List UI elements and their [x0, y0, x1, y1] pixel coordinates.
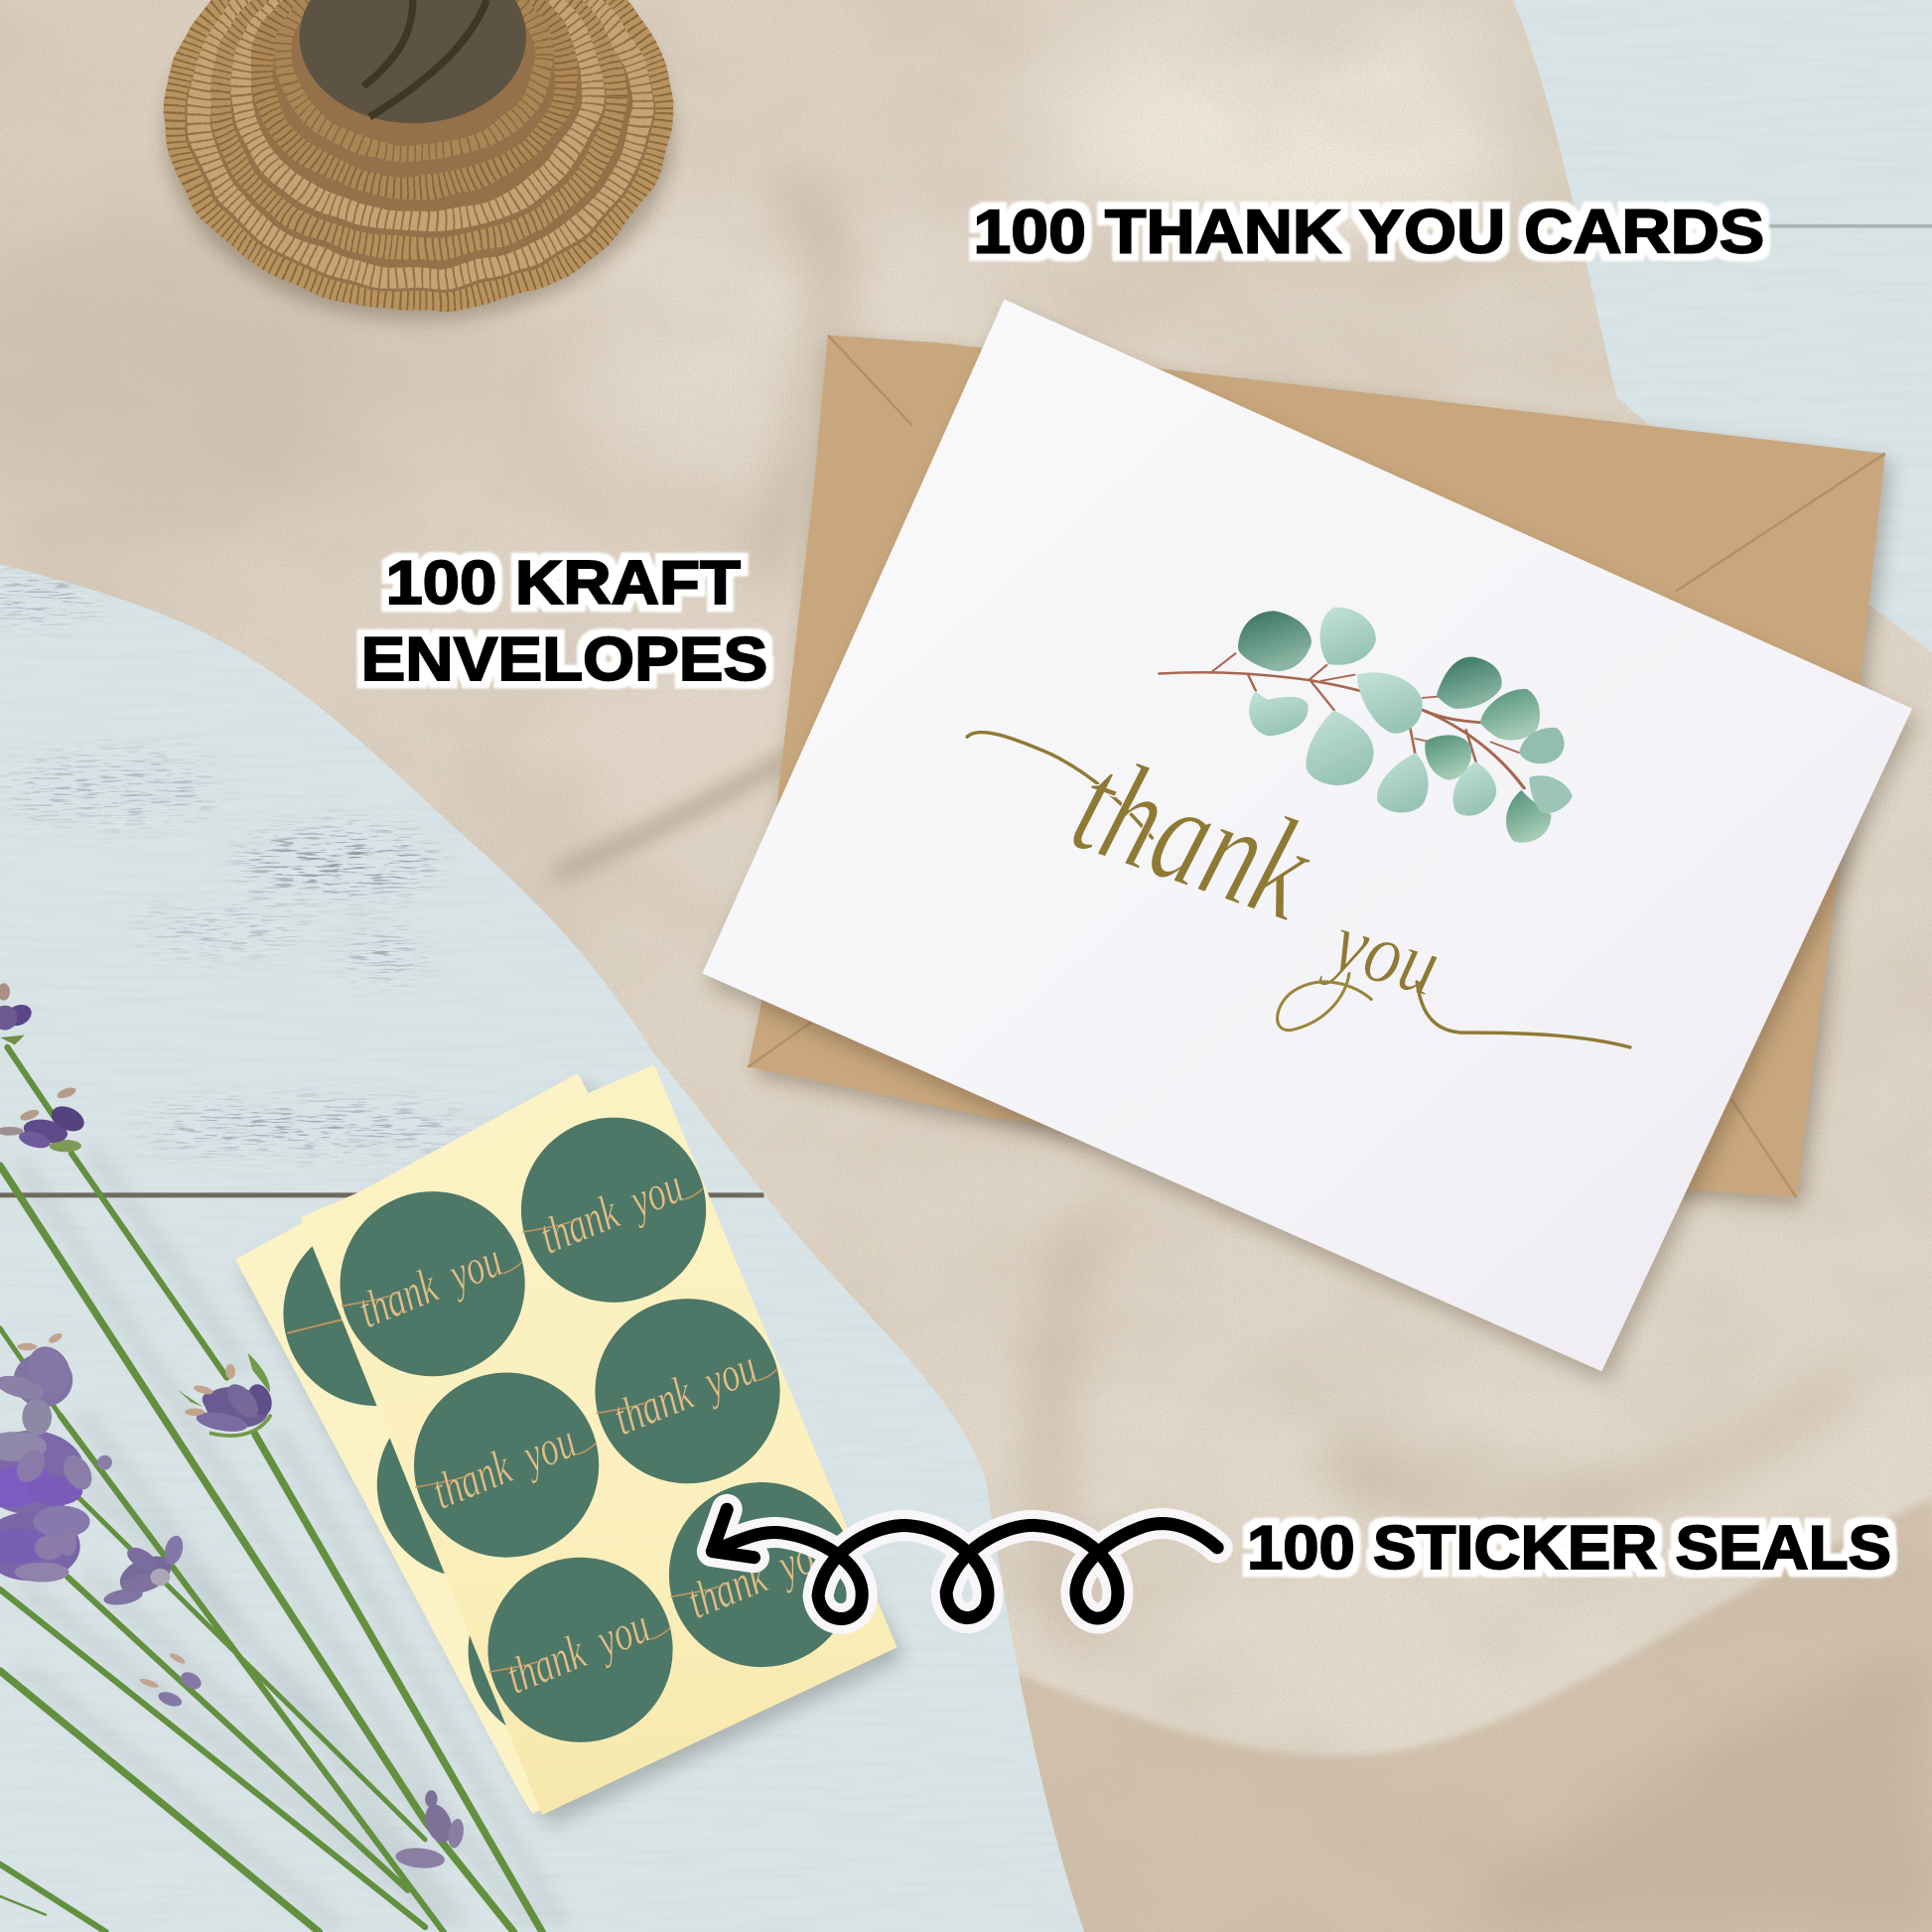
- sticker: bottom left: thank you: [498, 1598, 657, 1705]
- back sticker sheet: [235, 1073, 788, 1814]
- lavender stems: [0, 1047, 542, 1932]
- gold script: thank you: you: [1316, 892, 1450, 1015]
- flower: second: [0, 1085, 88, 1152]
- curly arrow pointing to stickers: [712, 1509, 1217, 1619]
- flower: central on long stem: [178, 1353, 276, 1436]
- gold script: thank you: thank: [1055, 724, 1332, 952]
- label: 100 kraft envelopes: 100 KRAFT: [385, 549, 741, 618]
- label: 100 sticker seals: 100 STICKER SEALS: [1247, 1514, 1891, 1583]
- lavender sprigs: [0, 983, 562, 1932]
- sticker: bottom right: [669, 1482, 854, 1667]
- background: wooden planks: [0, 224, 1932, 1197]
- gold script: thank you: [967, 724, 1630, 1047]
- sticker: middle right: [595, 1299, 780, 1483]
- flower: bottom: [395, 1790, 466, 1870]
- flower: large cluster left: [0, 1331, 112, 1583]
- lavender flower heads: [0, 983, 466, 1870]
- label: 100 kraft envelopes: ENVELOPES: [361, 625, 767, 694]
- flower: small buds: [139, 1651, 205, 1710]
- flower: lower right cluster: [102, 1534, 186, 1607]
- sticker: middle left: [414, 1373, 599, 1558]
- white thank you card: [702, 300, 1917, 1382]
- label: 100 thank you cards: 100 THANK YOU CARDS: [973, 198, 1764, 266]
- sticker: bottom right: thank you: [680, 1523, 838, 1629]
- sticker: middle left: thank you: [425, 1414, 584, 1520]
- jute twine roll: [165, 0, 673, 321]
- sticker: top left: [341, 1191, 525, 1376]
- eucalyptus branch: [1160, 608, 1573, 843]
- envelope flap fold lines: [748, 336, 1885, 1197]
- twine centre hole: [300, 0, 526, 123]
- sticker: top left: thank you: [350, 1232, 509, 1339]
- sticker: top right: [521, 1118, 706, 1303]
- kraft envelope: [748, 336, 1891, 1206]
- sticker: bottom left: [487, 1558, 673, 1742]
- sticker sheets: [235, 1064, 904, 1826]
- label: 100 kraft envelopes: [361, 549, 767, 694]
- sticker: top right: thank you: [532, 1159, 691, 1265]
- front sticker sheet: [301, 1064, 897, 1815]
- flower: top: [0, 983, 35, 1044]
- sticker: middle right: thank you: [606, 1339, 764, 1447]
- lavender stem shadows: [20, 1149, 562, 1927]
